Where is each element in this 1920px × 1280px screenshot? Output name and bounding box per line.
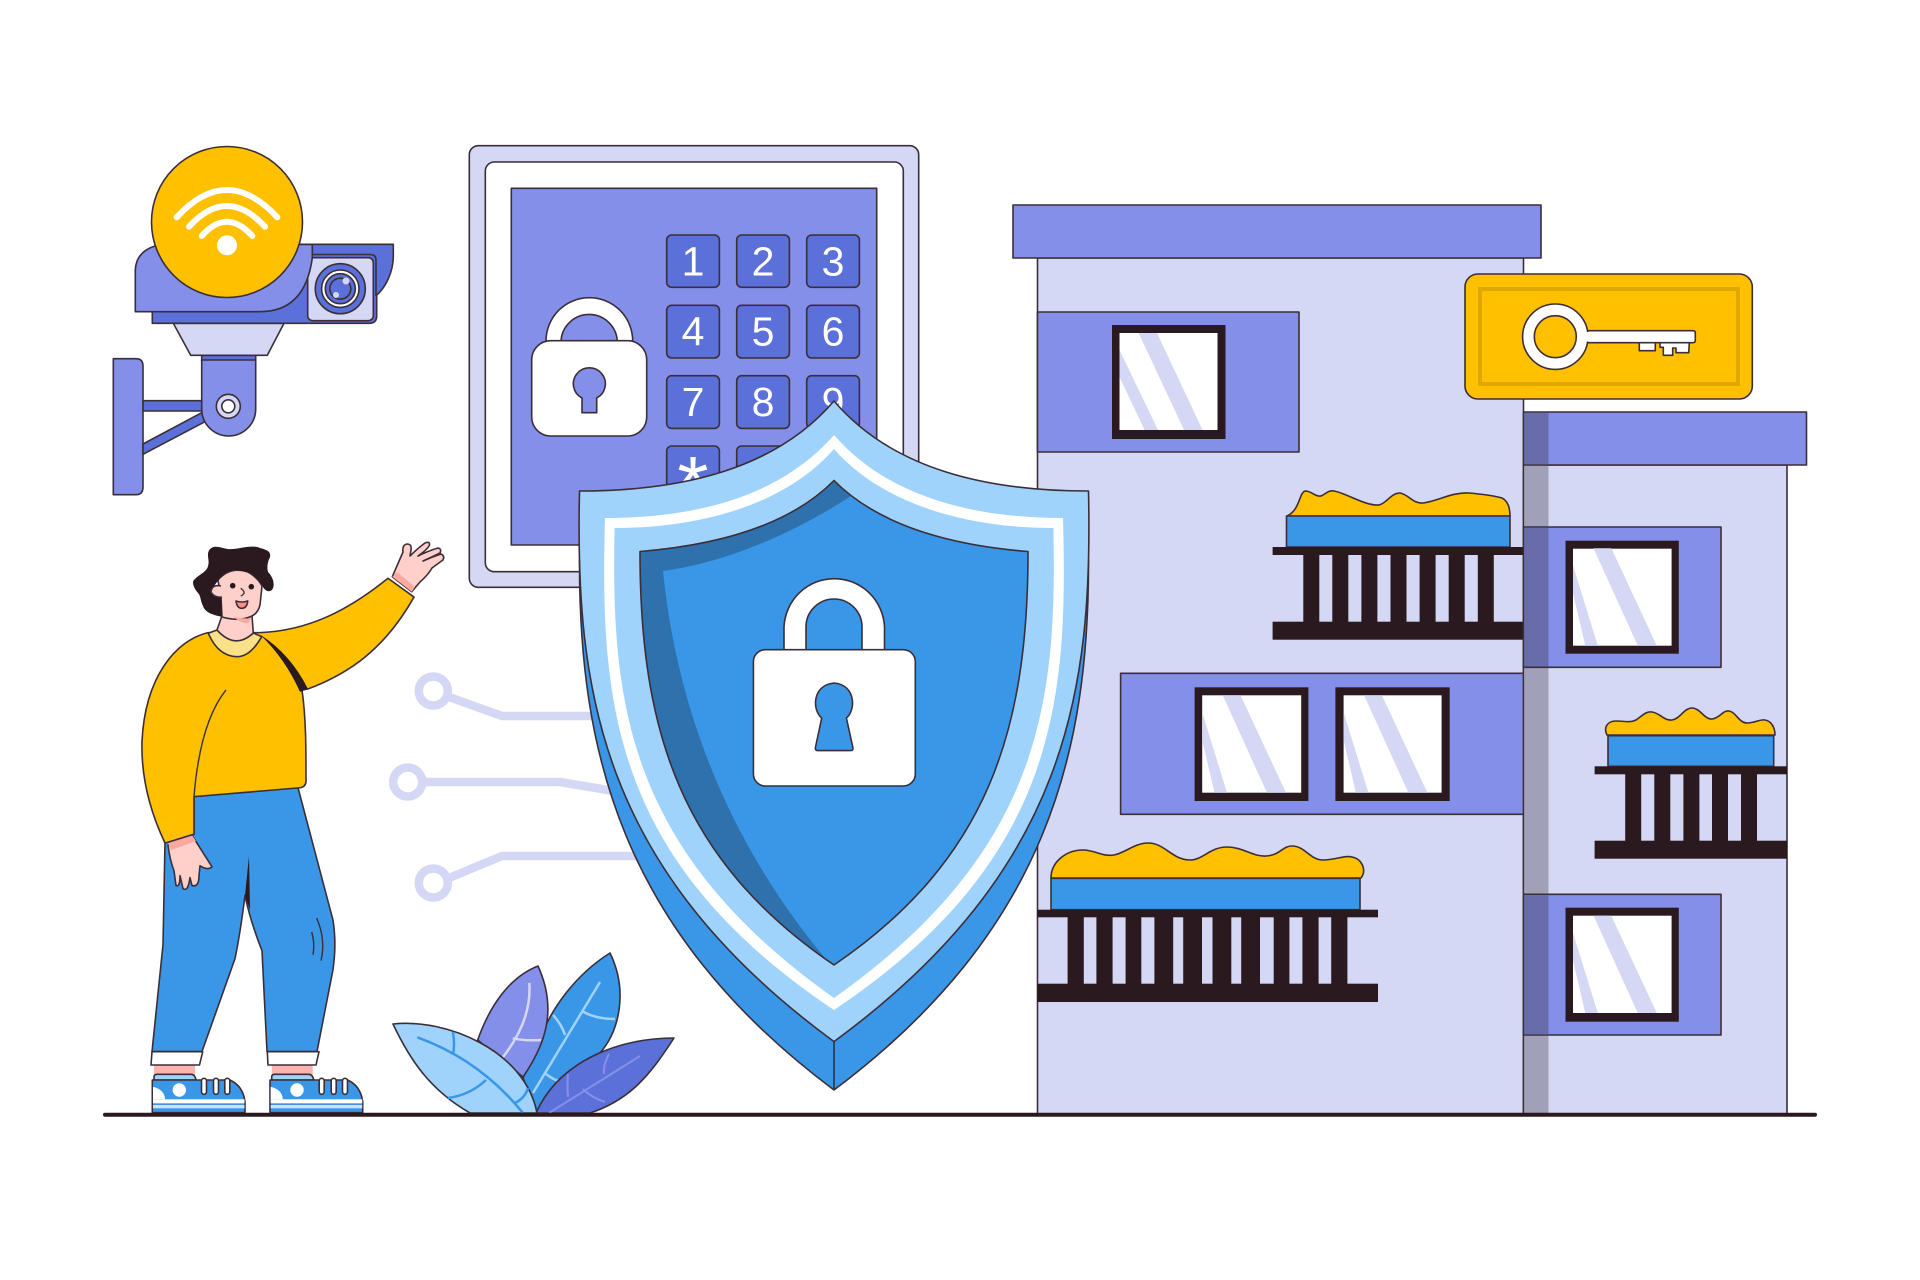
collar (208, 630, 262, 657)
neck (217, 612, 253, 641)
panel: keypad (469, 146, 919, 587)
blue leaf (523, 953, 620, 1113)
upper window (1524, 527, 1721, 667)
number keys: 6 (822, 309, 844, 355)
lens box (308, 254, 376, 321)
right cuff and shoe (270, 1062, 363, 1113)
number keys: 3 (822, 239, 844, 285)
mouth (236, 601, 248, 608)
shield back layer (579, 560, 1089, 1090)
column shadow (1524, 465, 1548, 1114)
balcony (1595, 708, 1787, 859)
number keys: * (677, 440, 709, 529)
face (218, 570, 262, 619)
light blue leaf (393, 1023, 537, 1113)
keypad lock icon (532, 298, 647, 436)
shield (579, 400, 1100, 1090)
top window panel (1038, 312, 1299, 452)
wall plate (113, 359, 143, 495)
dark blue leaf (536, 1038, 674, 1113)
wifi badge (152, 146, 302, 298)
leaves plant (393, 953, 674, 1113)
shield inner (640, 480, 1028, 965)
number keys: 8 (752, 379, 774, 425)
building roof (1524, 412, 1806, 465)
building roof (1013, 205, 1541, 258)
lower balcony (1037, 843, 1378, 1002)
camera arm (202, 355, 256, 436)
number keys: 4 (682, 309, 704, 355)
illustration: home security scene (103, 144, 1817, 1117)
upper balcony (1273, 491, 1524, 640)
building body (1524, 465, 1787, 1114)
nose (241, 588, 244, 596)
lower window (1524, 894, 1721, 1035)
number keys: 2 (752, 239, 774, 285)
trouser cuffs (151, 1052, 319, 1065)
middle window panel (1121, 673, 1524, 814)
camera mount (173, 323, 284, 355)
ear (211, 586, 222, 597)
purple leaf (478, 966, 548, 1077)
number keys: 9 (822, 379, 844, 425)
hair (193, 547, 274, 617)
circuit lines (393, 676, 650, 898)
head (193, 547, 274, 623)
sweater (142, 578, 414, 843)
shield white band (604, 435, 1064, 1010)
panel: left building (1013, 205, 1541, 1114)
key (1523, 304, 1695, 369)
building body (1038, 258, 1524, 1114)
shield padlock (753, 579, 915, 786)
ground line (105, 1113, 1815, 1117)
shield outer layer (579, 401, 1089, 1042)
number keys: 1 (682, 239, 704, 285)
lowered hand (168, 835, 212, 889)
panel: right building (1524, 412, 1806, 1114)
number keys: 5 (752, 309, 774, 355)
raised hand (392, 542, 444, 592)
pants (152, 788, 335, 1052)
number keys: 7 (682, 379, 704, 425)
number keys (667, 235, 859, 529)
camera housing (152, 244, 393, 323)
icon: key sign (1465, 274, 1752, 399)
person (142, 542, 444, 1113)
left cuff and shoe (152, 1062, 245, 1113)
eyes (230, 583, 254, 590)
struts (143, 401, 205, 454)
camera hood (135, 244, 312, 312)
icon: security camera (113, 146, 393, 495)
neck shadow (233, 617, 251, 623)
